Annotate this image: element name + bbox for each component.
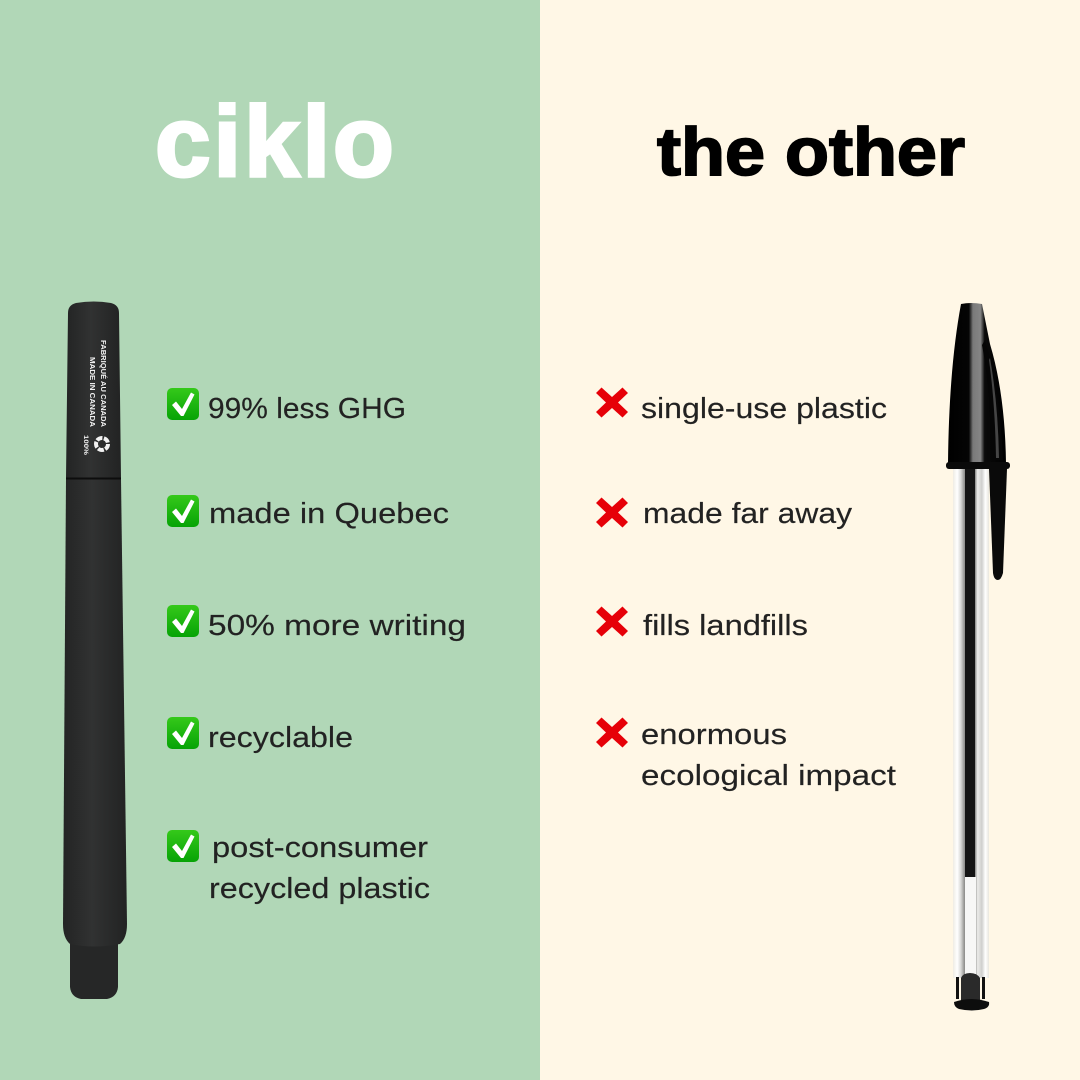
item: enormous ecological impact: ecological impact: [641, 760, 896, 792]
item: 50% more writing: 50% more writing: [208, 610, 466, 642]
item: post-consumer recycled plastic: post-consumer: [212, 832, 428, 864]
title: the other: the other: [657, 114, 965, 190]
pen imprint text: 100%: [82, 435, 89, 455]
icon: ciklo black pen: [63, 302, 127, 999]
list: the other drawbacks: [596, 388, 896, 792]
item: post-consumer recycled plastic: [167, 830, 430, 905]
pen imprint text: [82, 340, 108, 455]
panel: ciklo background: [0, 0, 540, 1080]
item: made far away: made far away: [643, 498, 853, 530]
item: post-consumer recycled plastic: recycled plastic: [209, 873, 430, 905]
item: made in Quebec: [167, 495, 449, 530]
icon: ballpoint pen: [946, 303, 1010, 1010]
item: 50% more writing: [167, 605, 466, 642]
list: ciklo benefits: [167, 388, 466, 905]
item: fills landfills: [596, 606, 808, 642]
item: enormous ecological impact: enormous: [641, 719, 787, 751]
item: single-use plastic: single-use plastic: [641, 393, 887, 425]
pen imprint text: MADE IN CANADA: [88, 357, 95, 427]
item: 99% less GHG: 99% less GHG: [208, 393, 406, 425]
item: recyclable: [167, 717, 353, 754]
item: enormous ecological impact: [596, 718, 896, 792]
item: 99% less GHG: [167, 388, 406, 425]
item: recyclable: recyclable: [208, 722, 353, 754]
panel: the other background: [540, 0, 1080, 1080]
item: single-use plastic: [596, 388, 887, 425]
title: ciklo: ciklo: [155, 86, 394, 198]
item: made in Quebec: made in Quebec: [209, 498, 449, 530]
item: fills landfills: fills landfills: [643, 610, 808, 642]
pen imprint text: FABRIQUÉ AU CANADA: [99, 340, 108, 427]
